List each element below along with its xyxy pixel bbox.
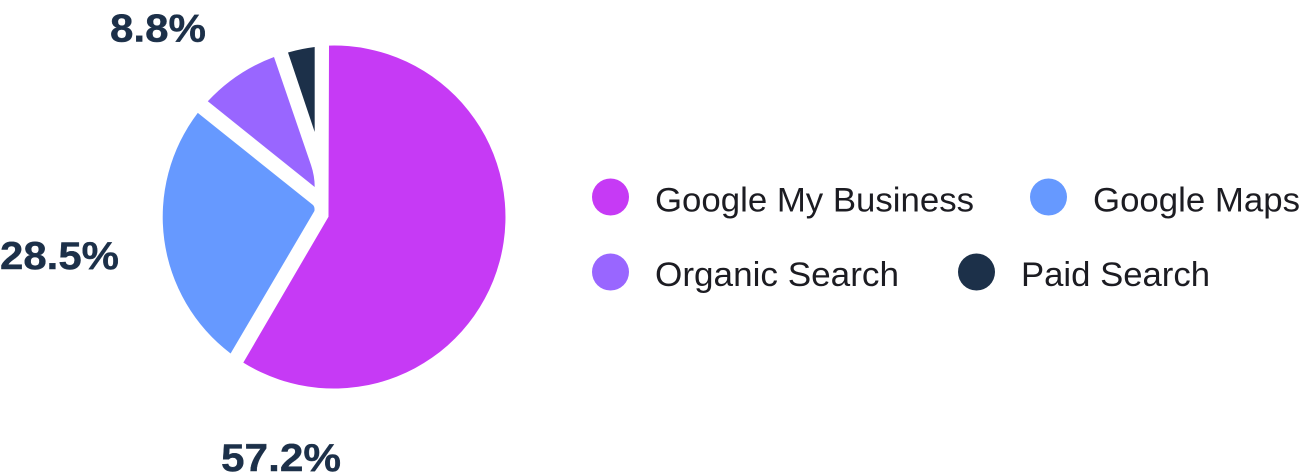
slice: Google Maps	[163, 113, 315, 354]
slice: Google My Business	[243, 46, 505, 389]
value label: 8.8%: 8.8%	[110, 8, 206, 50]
legend item: Google Maps	[1030, 178, 1300, 220]
slice: Paid Search	[288, 47, 315, 132]
legend item: Organic Search: Organic Search	[655, 256, 899, 294]
pie chart	[163, 46, 505, 389]
legend item: Paid Search	[958, 254, 1210, 294]
value label: 28.5%: 28.5%	[0, 235, 119, 278]
legend item: Paid Search: Paid Search	[1021, 256, 1210, 294]
legend	[592, 178, 1300, 294]
legend item: Google Maps: Google Maps	[1093, 182, 1300, 220]
legend item: Google My Business: Google My Business	[655, 182, 974, 220]
slice: Organic Search	[208, 57, 315, 187]
